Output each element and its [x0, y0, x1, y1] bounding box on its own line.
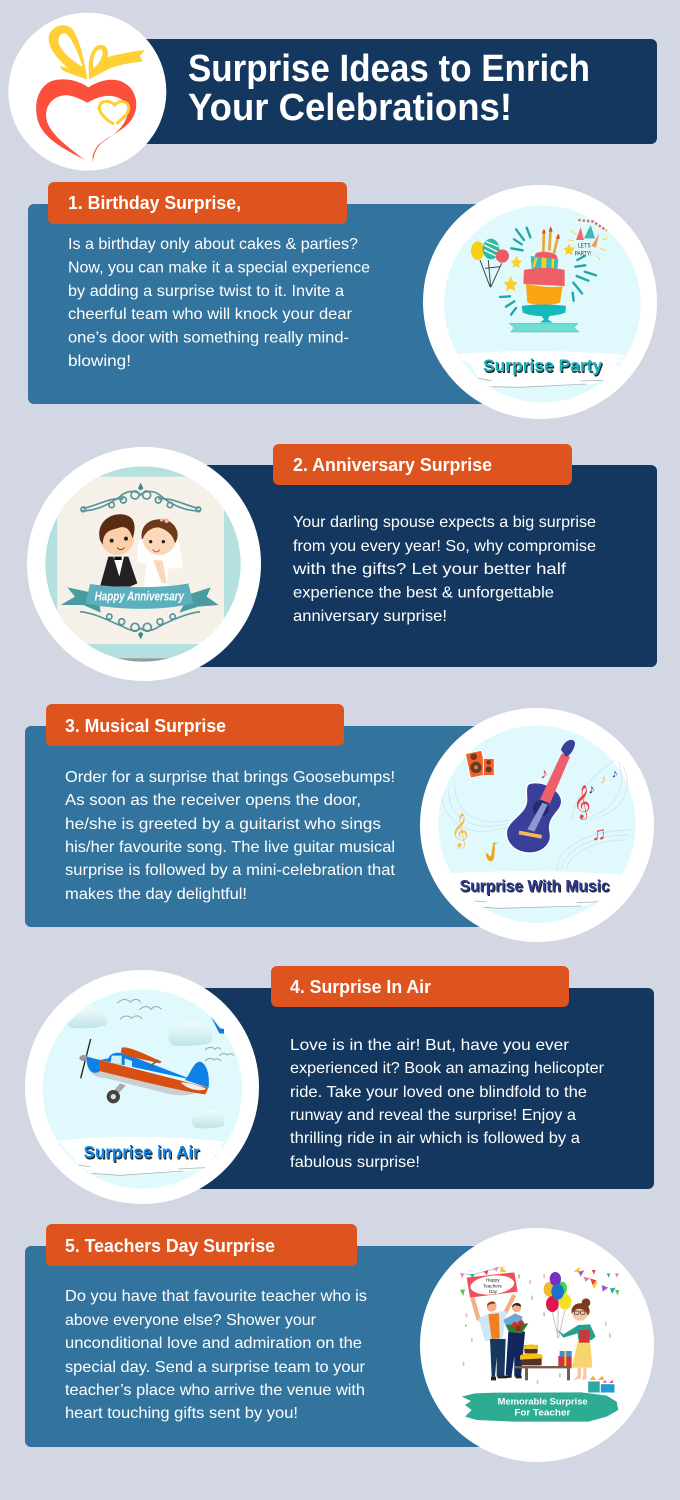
party hats and bunting: PARTY!	[575, 250, 592, 257]
label	[498, 1396, 588, 1418]
music notes: 𝄞	[573, 786, 591, 820]
text block	[290, 1037, 605, 1171]
panel: musical surprise	[25, 704, 654, 942]
text block: unconditional love and admiration on the	[65, 1335, 362, 1352]
music notes: ♪	[540, 765, 548, 782]
staves	[442, 760, 632, 870]
label: Surprise Party	[483, 356, 602, 376]
text block: his/her favourite song. The live guitar musical	[65, 839, 395, 856]
text block: makes the day delightful!	[65, 886, 247, 903]
title: Surprise Ideas to Enrich	[188, 48, 590, 90]
music notes: 𝄞	[451, 813, 469, 849]
brush banner	[458, 351, 625, 387]
ribbon: Happy Anniversary	[95, 589, 185, 603]
green brush banner	[462, 1392, 618, 1422]
plane	[79, 1039, 209, 1103]
circle: surprise with music illustration	[420, 708, 654, 942]
label: Surprise With Music	[461, 878, 611, 897]
text block: Order for a surprise that brings Goosebumps!	[65, 769, 395, 786]
music notes: ♪	[612, 766, 618, 780]
text block	[65, 769, 396, 903]
text block: from you every year! So, why compromise	[293, 538, 596, 555]
heading tab	[271, 966, 569, 1007]
cake table	[515, 1344, 572, 1380]
text block	[68, 236, 370, 370]
clouds	[67, 1007, 225, 1128]
rays	[500, 228, 596, 315]
balloons	[544, 1272, 571, 1338]
text block: above everyone else? Shower your	[65, 1312, 317, 1329]
heading tab	[48, 182, 347, 224]
music notes: ♫	[592, 824, 606, 845]
panel: surprise in air	[25, 966, 654, 1204]
brush banner	[58, 1137, 224, 1176]
text block: anniversary surprise!	[293, 608, 447, 625]
heading tab: 2. Anniversary Surprise	[293, 455, 492, 475]
small plane	[211, 1017, 224, 1034]
text block: experience the best & unforgettable	[293, 584, 554, 602]
music notes: ♪	[600, 771, 607, 786]
brush banner	[452, 871, 623, 908]
saxophone	[486, 843, 498, 861]
heading tab: 5. Teachers Day Surprise	[65, 1236, 275, 1256]
text block: cheerful team who will knock your dear	[68, 306, 353, 323]
music notes: ♪	[588, 781, 595, 796]
party hats and bunting: LET'S	[578, 243, 591, 250]
label: Surprise With Music	[460, 876, 610, 895]
heading tab	[46, 1224, 357, 1266]
text block: As soon as the receiver opens the door,	[65, 792, 361, 809]
label: For Teacher	[514, 1408, 571, 1418]
party hats and bunting	[568, 220, 607, 260]
heading tab: 3. Musical Surprise	[65, 716, 226, 736]
sign	[467, 1272, 518, 1298]
text block: runway and reveal the surprise! Enjoy a	[290, 1107, 576, 1124]
label: Surprise Party	[484, 357, 603, 377]
panel: teachers day surprise	[25, 1224, 654, 1462]
text block: ride. Take your loved one blindfold to the	[290, 1084, 587, 1101]
text block: Love is in the air! But, have you ever	[290, 1037, 570, 1054]
sign: Day	[489, 1289, 498, 1294]
heading tab: 4. Surprise In Air	[290, 977, 431, 997]
sign: Happy	[486, 1278, 500, 1283]
title	[188, 48, 590, 129]
text block: he/she is greeted by a guitarist who sings	[65, 816, 381, 833]
text block: blowing!	[68, 353, 131, 370]
balloons	[471, 239, 509, 287]
heading tab: 1. Birthday Surprise,	[68, 193, 241, 213]
text block: thrilling ride in air which is followed by a	[290, 1130, 580, 1147]
teacher	[557, 1298, 596, 1380]
two men	[472, 1295, 528, 1380]
confetti	[463, 1274, 607, 1384]
text block: experienced it? Book an amazing helicopter	[290, 1060, 605, 1077]
guitar	[506, 740, 575, 853]
title banner	[120, 39, 657, 144]
text block: fabulous surprise!	[290, 1154, 420, 1171]
stars	[504, 244, 575, 291]
text block: Do you have that favourite teacher who is	[65, 1288, 367, 1305]
title: Your Celebrations!	[188, 87, 512, 129]
bunting	[460, 1267, 619, 1296]
label: Memorable Surprise	[498, 1396, 588, 1406]
sign: Teachers	[483, 1283, 502, 1288]
label: Surprise in Air	[85, 1143, 201, 1163]
text block: heart touching gifts sent by you!	[65, 1405, 298, 1422]
text block: Your darling spouse expects a big surprise	[293, 514, 596, 531]
heading tab	[273, 444, 572, 485]
ribbon	[61, 583, 219, 613]
ornaments	[80, 491, 201, 631]
text block: by adding a surprise twist to it. Invite a	[68, 283, 344, 300]
text block: with the gifts? Let your better half	[292, 561, 567, 578]
text block: Is a birthday only about cakes & parties?	[68, 236, 358, 253]
bride	[137, 518, 183, 587]
cake	[509, 226, 579, 332]
text block: surprise is followed by a mini-celebration that	[65, 862, 396, 879]
icon: heart gift logo	[8, 13, 166, 171]
circle: surprise party illustration	[423, 185, 657, 419]
text block: teacher’s place who arrive the venue with	[65, 1382, 365, 1399]
text block: Now, you can make it a special experience	[68, 260, 370, 276]
label: Surprise in Air	[84, 1142, 200, 1162]
panel: anniversary surprise	[27, 444, 657, 681]
circle: happy anniversary illustration	[27, 447, 261, 681]
speakers	[465, 750, 494, 778]
music notes	[451, 765, 618, 849]
text block: one’s door with something really mind-	[68, 330, 349, 346]
text block	[292, 514, 596, 625]
text block	[65, 1288, 367, 1422]
circle: surprise in air illustration	[25, 970, 259, 1204]
circle: memorable surprise for teacher illustration	[420, 1228, 654, 1462]
groom	[99, 514, 137, 587]
gift boxes	[588, 1375, 615, 1393]
panel: birthday surprise	[28, 182, 657, 419]
heading tab	[46, 704, 344, 746]
birds	[117, 999, 234, 1061]
text block: special day. Send a surprise team to your	[65, 1359, 366, 1376]
